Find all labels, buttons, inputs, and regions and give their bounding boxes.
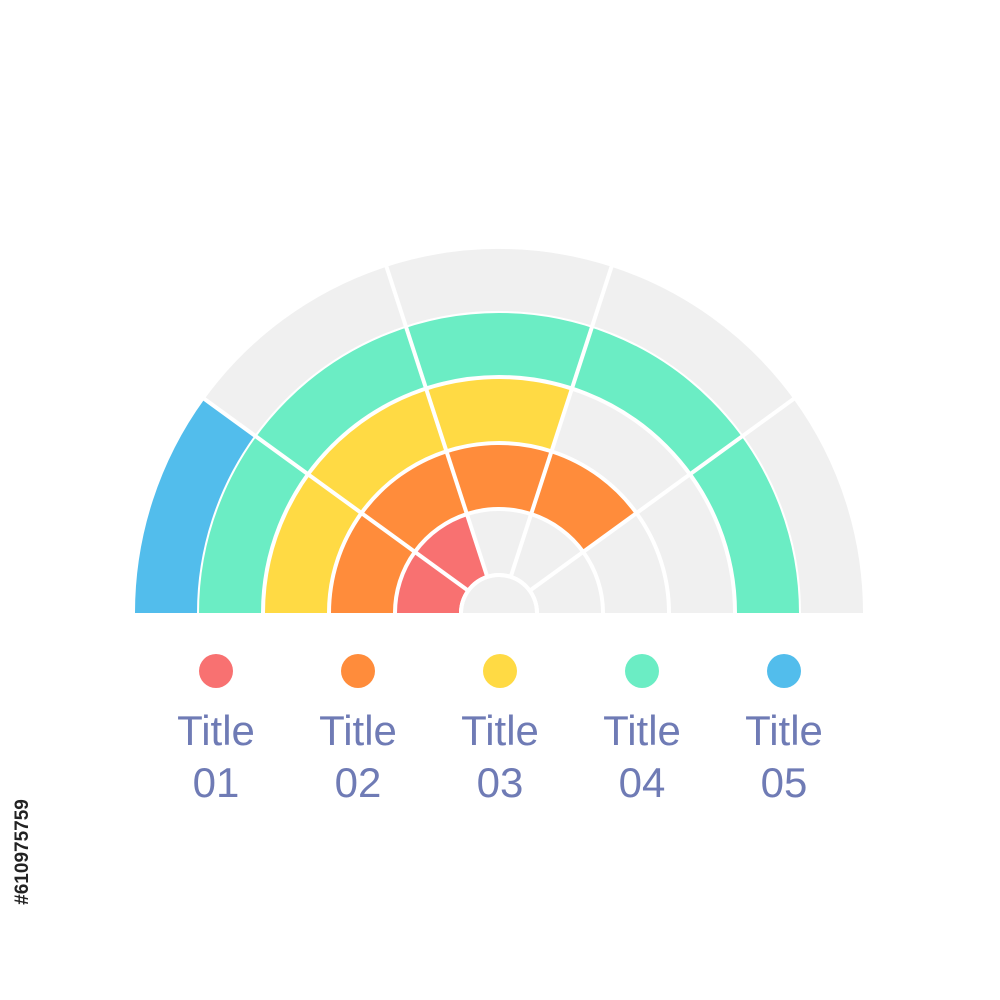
ring 5: blue xyxy=(166,280,832,613)
legend item 04: 04 xyxy=(619,759,665,806)
legend item 01: Title xyxy=(177,707,255,754)
legend item 02: Title xyxy=(319,707,397,754)
legend item 05: Title xyxy=(745,707,823,754)
ring 2: orange xyxy=(362,476,636,613)
legend item 04: Title xyxy=(603,707,681,754)
chart: semicircular ring chart xyxy=(166,266,832,613)
legend xyxy=(177,654,823,806)
legend item 03 xyxy=(461,654,539,806)
legend item 04 xyxy=(603,654,681,806)
legend item 01 xyxy=(177,654,255,806)
legend item 03: 03 xyxy=(477,759,523,806)
ring 3: yellow xyxy=(296,410,702,613)
legend item 02: 02 xyxy=(335,759,381,806)
legend item 05 xyxy=(745,654,823,806)
ring 4: green xyxy=(230,344,768,613)
side id text: #610975759 xyxy=(12,799,33,905)
inner hole xyxy=(463,577,535,613)
ring 1: red xyxy=(428,542,570,613)
legend item 05: 05 xyxy=(761,759,807,806)
legend item 02 xyxy=(319,654,397,806)
legend item 03: Title xyxy=(461,707,539,754)
legend item 01: 01 xyxy=(193,759,239,806)
